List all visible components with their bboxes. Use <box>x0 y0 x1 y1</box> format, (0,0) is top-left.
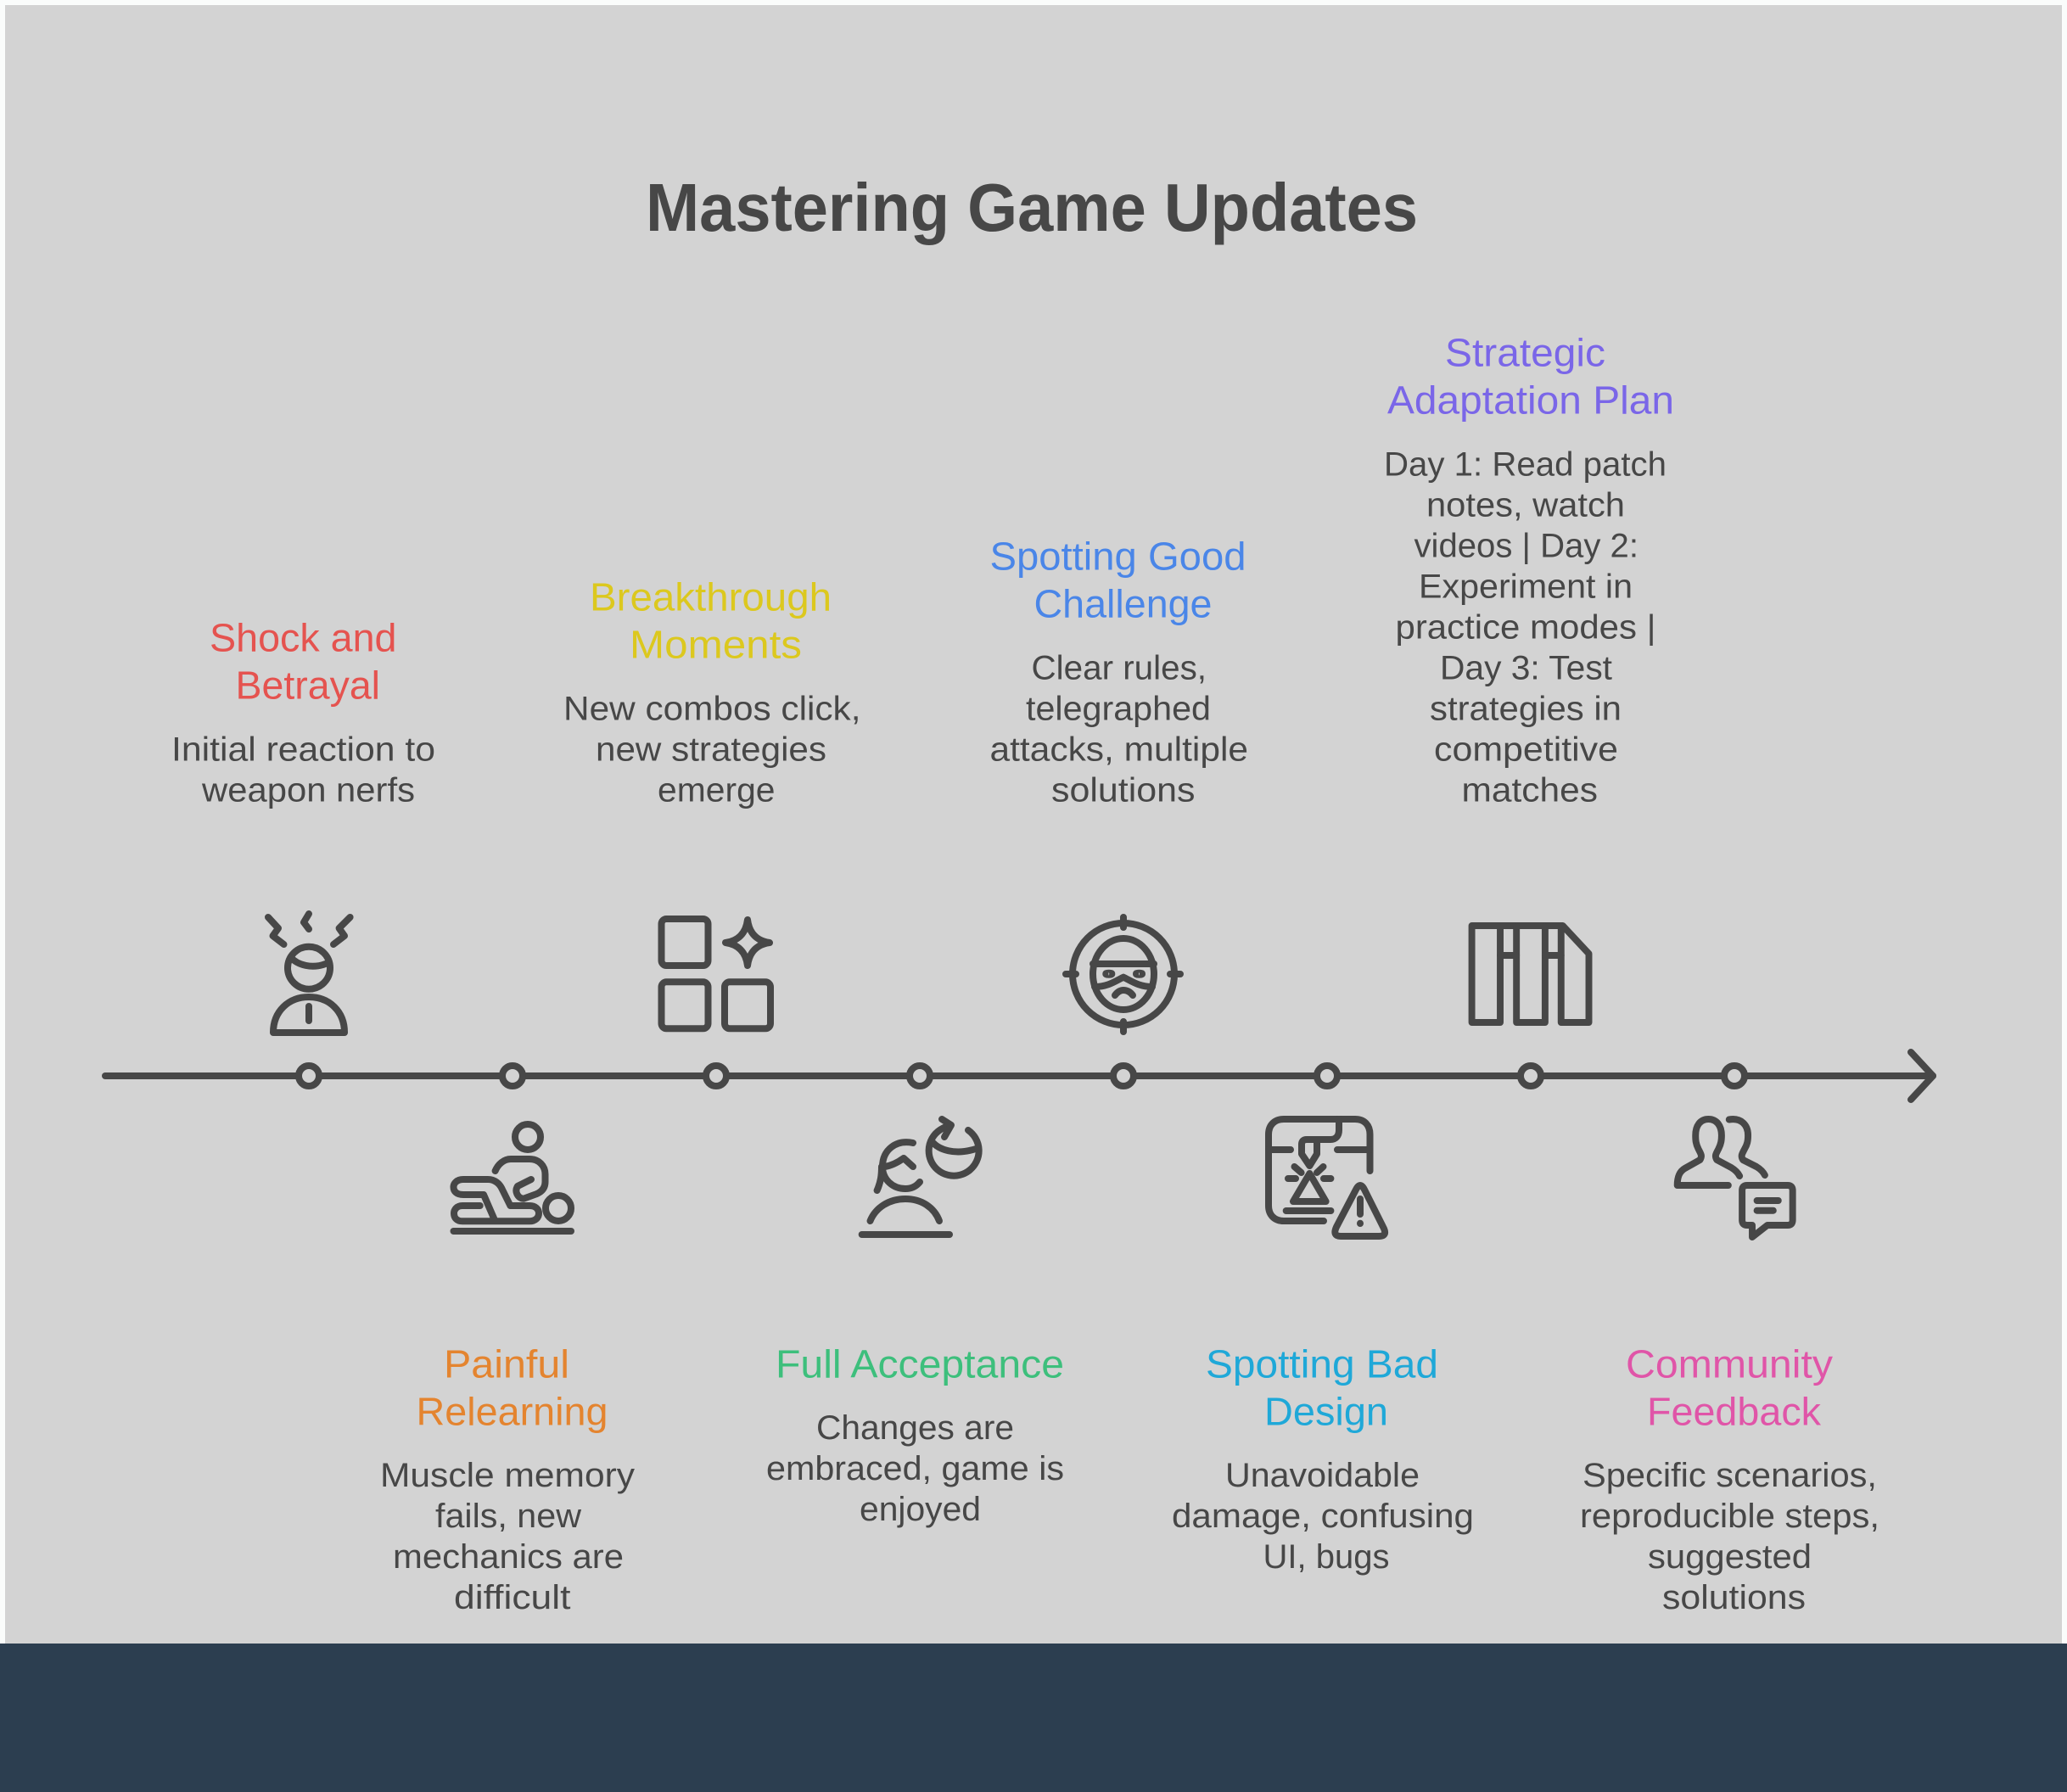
description: Spotting Good Challenge: telegraphed <box>1026 691 1211 728</box>
description: Spotting Good Challenge: Clear rules, <box>1032 650 1207 687</box>
description: Painful Relearning: Muscle memory <box>380 1457 635 1494</box>
icon: people with speech bubble <box>1678 1119 1793 1237</box>
description: Painful Relearning: difficult <box>454 1579 570 1616</box>
heading: Spotting Good Challenge <box>989 535 1246 626</box>
description: Painful Relearning <box>380 1457 635 1616</box>
stage: Full Acceptance <box>766 1119 1064 1528</box>
heading: Spotting Good Challenge: Spotting Good <box>989 535 1246 579</box>
description: Strategic Adaptation Plan: Day 3: Test <box>1440 650 1612 687</box>
icon: masked face in crosshair <box>1066 917 1180 1032</box>
icon: person with rotating head <box>862 1119 979 1235</box>
description: Strategic Adaptation Plan: Experiment in <box>1419 568 1633 606</box>
heading: Shock and Betrayal <box>210 616 397 708</box>
heading: Spotting Good Challenge: Challenge <box>1034 582 1212 626</box>
description: Breakthrough Moments <box>563 691 860 809</box>
description: Spotting Good Challenge: solutions <box>1051 772 1195 809</box>
heading: Community Feedback: Feedback <box>1647 1390 1822 1434</box>
description: Community Feedback: Specific scenarios, <box>1582 1457 1877 1494</box>
heading: Painful Relearning: Relearning <box>416 1390 608 1434</box>
description: Community Feedback: reproducible steps, <box>1580 1498 1879 1535</box>
description: Spotting Bad Design <box>1172 1457 1474 1576</box>
stage: Breakthrough Moments <box>563 575 860 1028</box>
description: Strategic Adaptation Plan: videos | Day 2: <box>1414 528 1638 565</box>
description: Breakthrough Moments: new strategies <box>596 731 826 769</box>
heading: Spotting Bad Design: Design <box>1264 1390 1388 1434</box>
heading: Community Feedback <box>1626 1342 1833 1434</box>
description: Community Feedback: suggested <box>1648 1538 1812 1576</box>
heading: Strategic Adaptation Plan <box>1387 331 1674 423</box>
description: Shock and Betrayal: Initial reaction to <box>171 731 435 769</box>
stage: Spotting Bad Design <box>1172 1119 1474 1576</box>
icon: binders <box>1472 926 1589 1022</box>
description: Strategic Adaptation Plan: competitive <box>1434 731 1618 769</box>
icon: squares and sparkle <box>662 919 770 1028</box>
description: Breakthrough Moments: New combos click, <box>563 691 860 728</box>
description: Strategic Adaptation Plan <box>1384 446 1666 809</box>
description: Community Feedback <box>1580 1457 1879 1616</box>
timeline arrow <box>105 1052 1933 1100</box>
heading: Breakthrough Moments: Moments <box>630 623 802 667</box>
description: Spotting Bad Design: Unavoidable <box>1225 1457 1420 1494</box>
footer band <box>0 1644 2067 1792</box>
icon: printer with warning triangle <box>1269 1119 1385 1236</box>
description: Full Acceptance: enjoyed <box>860 1491 981 1528</box>
title: Mastering Game Updates <box>646 170 1418 245</box>
description: Shock and Betrayal <box>171 731 435 809</box>
description: Spotting Bad Design: UI, bugs <box>1263 1538 1390 1576</box>
description: Breakthrough Moments: emerge <box>658 772 776 809</box>
description: Strategic Adaptation Plan: strategies in <box>1430 691 1622 728</box>
heading: Breakthrough Moments <box>590 575 832 667</box>
stage: Painful Relearning <box>380 1124 635 1616</box>
description: Full Acceptance: embraced, game is <box>766 1450 1064 1487</box>
description: Strategic Adaptation Plan: matches <box>1461 772 1598 809</box>
heading: Painful Relearning <box>416 1342 608 1434</box>
heading: Community Feedback: Community <box>1626 1342 1833 1386</box>
icon: person stretching <box>453 1124 571 1231</box>
description: Community Feedback: solutions <box>1662 1579 1806 1616</box>
heading: Strategic Adaptation Plan: Strategic <box>1445 331 1605 375</box>
icon: shocked person <box>268 914 350 1033</box>
heading: Spotting Bad Design: Spotting Bad <box>1206 1342 1438 1386</box>
description: Spotting Good Challenge <box>989 650 1248 809</box>
description: Strategic Adaptation Plan: notes, watch <box>1426 487 1625 524</box>
heading: Spotting Bad Design <box>1206 1342 1438 1434</box>
stage: Spotting Good Challenge <box>989 535 1248 1032</box>
description: Strategic Adaptation Plan: practice modes | <box>1395 609 1656 647</box>
stage: Strategic Adaptation Plan <box>1384 331 1674 1022</box>
stage: Shock and Betrayal <box>171 616 435 1033</box>
heading: Shock and Betrayal: Betrayal <box>236 664 380 708</box>
heading: Shock and Betrayal: Shock and <box>210 616 397 660</box>
heading: Breakthrough Moments: Breakthrough <box>590 575 832 619</box>
description: Spotting Good Challenge: attacks, multiple <box>989 731 1248 769</box>
description: Painful Relearning: fails, new <box>435 1498 581 1535</box>
description: Strategic Adaptation Plan: Day 1: Read patch <box>1384 446 1666 484</box>
description: Painful Relearning: mechanics are <box>393 1538 624 1576</box>
description: Shock and Betrayal: weapon nerfs <box>201 772 415 809</box>
heading: Painful Relearning: Painful <box>444 1342 569 1386</box>
stage: Community Feedback <box>1580 1119 1879 1616</box>
heading: Full Acceptance: Full Acceptance <box>776 1342 1064 1386</box>
description: Full Acceptance <box>766 1409 1064 1528</box>
description: Full Acceptance: Changes are <box>816 1409 1014 1447</box>
heading: Strategic Adaptation Plan: Adaptation Plan <box>1387 378 1674 423</box>
description: Spotting Bad Design: damage, confusing <box>1172 1498 1474 1535</box>
